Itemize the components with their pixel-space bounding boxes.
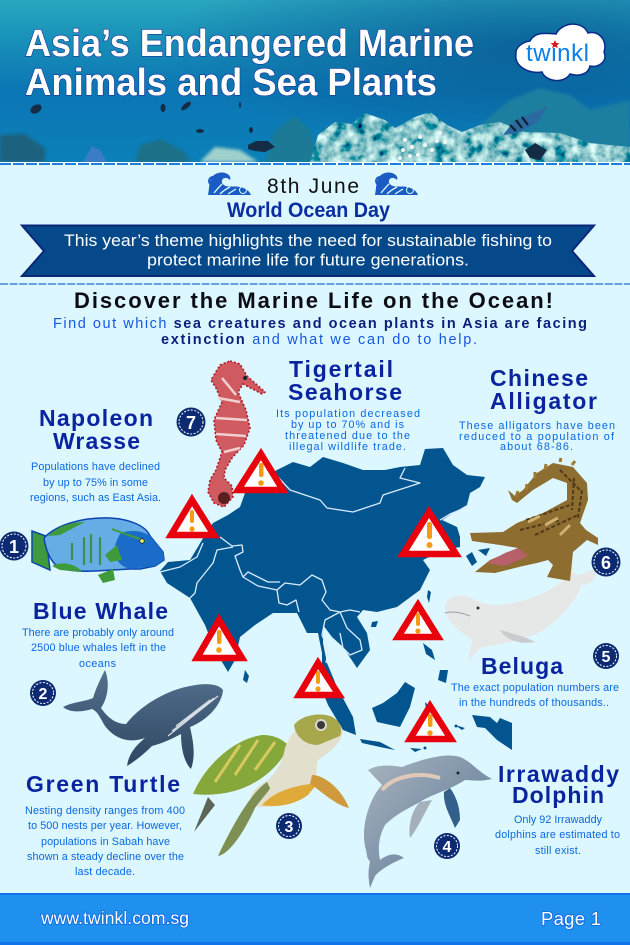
logo: twinkl cloud (516, 24, 605, 81)
label: Green Turtle: populations in Sabah have (41, 836, 170, 848)
label: Blue Whale: Blue Whale (33, 598, 168, 624)
Borneo (372, 682, 415, 727)
intro text (53, 316, 587, 348)
banner: protect marine life for future generations. (147, 250, 469, 270)
label: Napoleon Wrasse: Wrasse (53, 428, 140, 454)
animal: Green Turtle (193, 714, 349, 856)
blue reef fish (83, 146, 107, 162)
banner: This year’s theme highlights the need for sustainable fishing to (64, 231, 552, 250)
coral reef texture (310, 112, 630, 162)
badge 1 (0, 532, 28, 560)
event name: World Ocean Day (227, 199, 390, 222)
badge 4 (434, 833, 460, 859)
label: Tigertail Seahorse: threatened due to the (285, 430, 410, 442)
label: Napoleon Wrasse (30, 405, 161, 504)
warning triangle: Mongolia (238, 454, 283, 490)
label: Chinese Alligator: Chinese (490, 365, 588, 391)
label: Blue Whale: oceans (79, 658, 117, 670)
label: Blue Whale: 2500 blue whales left in the (31, 642, 166, 654)
label: Beluga: Beluga (481, 653, 563, 679)
warning triangle: India (197, 620, 242, 658)
banner (22, 226, 594, 276)
label: Green Turtle: shown a steady decline over the (27, 851, 184, 863)
badge 6: 6 (601, 553, 611, 573)
intro heading: Discover the Marine Life on the Ocean! (74, 288, 553, 313)
title: Animals and Sea Plants (25, 62, 437, 104)
badge 4: 4 (443, 839, 452, 856)
label: Tigertail Seahorse: illegal wildlife trade. (289, 441, 406, 453)
date: 8th June (267, 175, 359, 198)
label: Green Turtle: Green Turtle (26, 771, 180, 797)
badge 3 (276, 813, 302, 839)
label: Irrawaddy Dolphin: Dolphin (512, 782, 604, 808)
white branching coral (398, 131, 447, 160)
borders (160, 468, 467, 663)
label: Chinese Alligator: Alligator (490, 388, 597, 414)
title: Asia’s Endangered Marine (25, 23, 474, 65)
label: Irrawaddy Dolphin: Only 92 Irrawaddy (514, 814, 603, 826)
label: Blue Whale: There are probably only around (22, 627, 174, 639)
warning triangle: China (403, 512, 456, 554)
label: Beluga (451, 653, 619, 709)
icon: wave right (375, 173, 418, 195)
badge 6 (592, 548, 620, 576)
label: Irrawaddy Dolphin: Irrawaddy (498, 761, 619, 787)
label: Napoleon Wrasse: Populations have declined (31, 461, 160, 473)
intro text: extinction and what we can do to help. (161, 332, 477, 348)
animal: Tigertail Seahorse (208, 361, 265, 507)
label: Irrawaddy Dolphin (495, 761, 620, 857)
intro text: Find out which sea creatures and ocean plants in Asia are facing (53, 316, 587, 332)
striped fish (503, 106, 548, 135)
animal: Blue Whale (63, 670, 223, 769)
label: Blue Whale (22, 598, 174, 670)
animal: Napoleon Wrasse (32, 518, 164, 583)
label: Tigertail Seahorse: Its population decreased (276, 408, 420, 420)
label: Beluga: in the hundreds of thousands.. (459, 697, 609, 709)
label: Tigertail Seahorse: Tigertail (289, 356, 393, 382)
label: Irrawaddy Dolphin: dolphins are estimated to (495, 829, 620, 841)
label: Green Turtle: to 500 nests per year. However, (28, 820, 182, 832)
badge 7: 7 (186, 413, 196, 433)
label: Tigertail Seahorse: by up to 70% and is (291, 419, 405, 431)
label: Tigertail Seahorse: Seahorse (288, 379, 402, 405)
badge 1: 1 (9, 537, 19, 557)
label: Green Turtle (25, 771, 185, 878)
label: Irrawaddy Dolphin: still exist. (535, 845, 581, 857)
badge 5: 5 (602, 649, 611, 666)
icon: wave left (208, 173, 251, 195)
Java (360, 739, 395, 750)
label: Napoleon Wrasse: Napoleon (39, 405, 153, 431)
website url: www.twinkl.com.sg (40, 908, 189, 928)
logo: twinkl cloud: twinkl (526, 40, 589, 67)
badge 2: 2 (39, 686, 48, 703)
title (25, 23, 474, 104)
dashed divider middle (0, 283, 630, 285)
animal: Irrawaddy Dolphin (364, 755, 492, 888)
badge 7 (176, 408, 206, 436)
warning triangle: Philippines sea (398, 605, 438, 637)
badge 2 (30, 680, 56, 706)
badge 3: 3 (285, 819, 294, 836)
Philippines, Taiwan and small islands (243, 548, 490, 752)
reef fish (29, 100, 547, 160)
label: Chinese Alligator: reduced to a population of (459, 431, 615, 443)
warning triangle: Indonesia (410, 706, 451, 739)
label: Chinese Alligator: These alligators have been (459, 420, 615, 432)
animal: Beluga (445, 566, 597, 662)
warning triangle: Pakistan (171, 500, 214, 535)
date row (208, 173, 418, 222)
page number: Page 1 (541, 908, 601, 929)
label: Beluga: The exact population numbers are (451, 682, 619, 694)
label: Green Turtle: Nesting density ranges from 400 (25, 805, 185, 817)
label: Green Turtle: last decade. (75, 866, 135, 878)
header photo: underwater reef (0, 0, 630, 165)
label: Chinese Alligator: about 68-86. (500, 441, 573, 453)
map of Asia (160, 448, 512, 752)
warning triangle: Malaysia (299, 663, 339, 695)
badge 5 (593, 643, 619, 669)
animal: Chinese Alligator (470, 458, 598, 581)
label: Tigertail Seahorse (276, 356, 420, 453)
label: Napoleon Wrasse: regions, such as East Asia. (30, 492, 161, 504)
label: Chinese Alligator (459, 365, 615, 453)
footer bar (0, 893, 630, 945)
New Guinea (472, 715, 512, 750)
mainland (160, 448, 485, 735)
label: Napoleon Wrasse: by up to 75% in some (43, 477, 148, 489)
dashed divider top (0, 162, 630, 165)
